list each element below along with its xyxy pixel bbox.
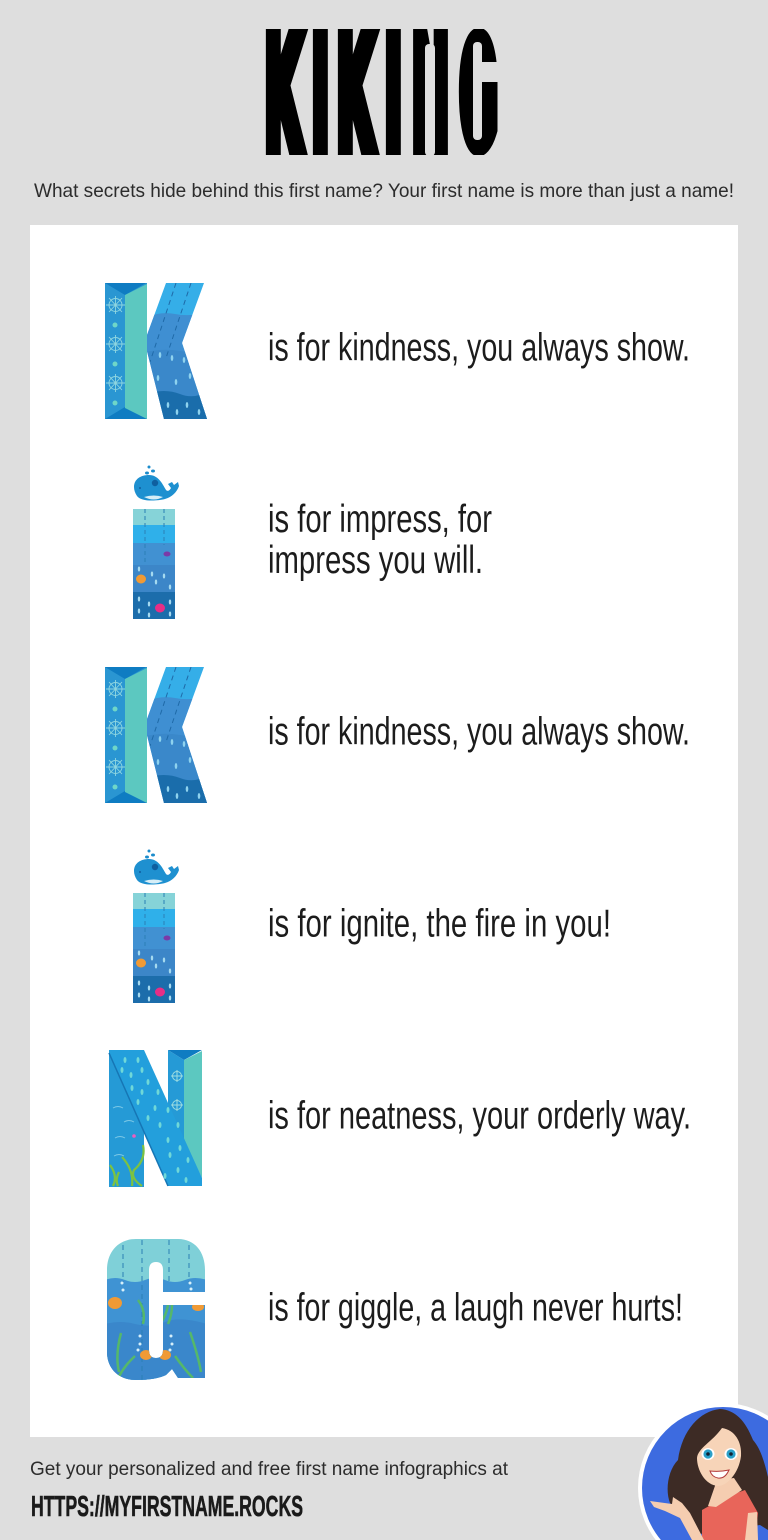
icon: whale and letter I (133, 466, 179, 619)
icon: letter K (105, 283, 210, 423)
icon: letter N (109, 1050, 202, 1187)
panel: letters card (30, 225, 738, 1437)
text: I line two: impress you will. (268, 539, 483, 582)
subtitle: What secrets hide behind this first name? Your first name is more than just a name! (34, 180, 734, 202)
footer text: Get your personalized and free first name infographics at (30, 1458, 509, 1480)
icon: letter K second (105, 667, 210, 807)
text: I line one: is for impress, for (268, 498, 492, 541)
text: I line second: is for ignite, the fire in you! (268, 902, 611, 946)
icon: whale and letter I second (133, 850, 179, 1003)
title: KIKING (267, 12, 496, 172)
icon: letter G (105, 1237, 207, 1382)
avatar (638, 1403, 768, 1540)
footer url: HTTPS://MYFIRSTNAME.ROCKS (31, 1491, 303, 1523)
